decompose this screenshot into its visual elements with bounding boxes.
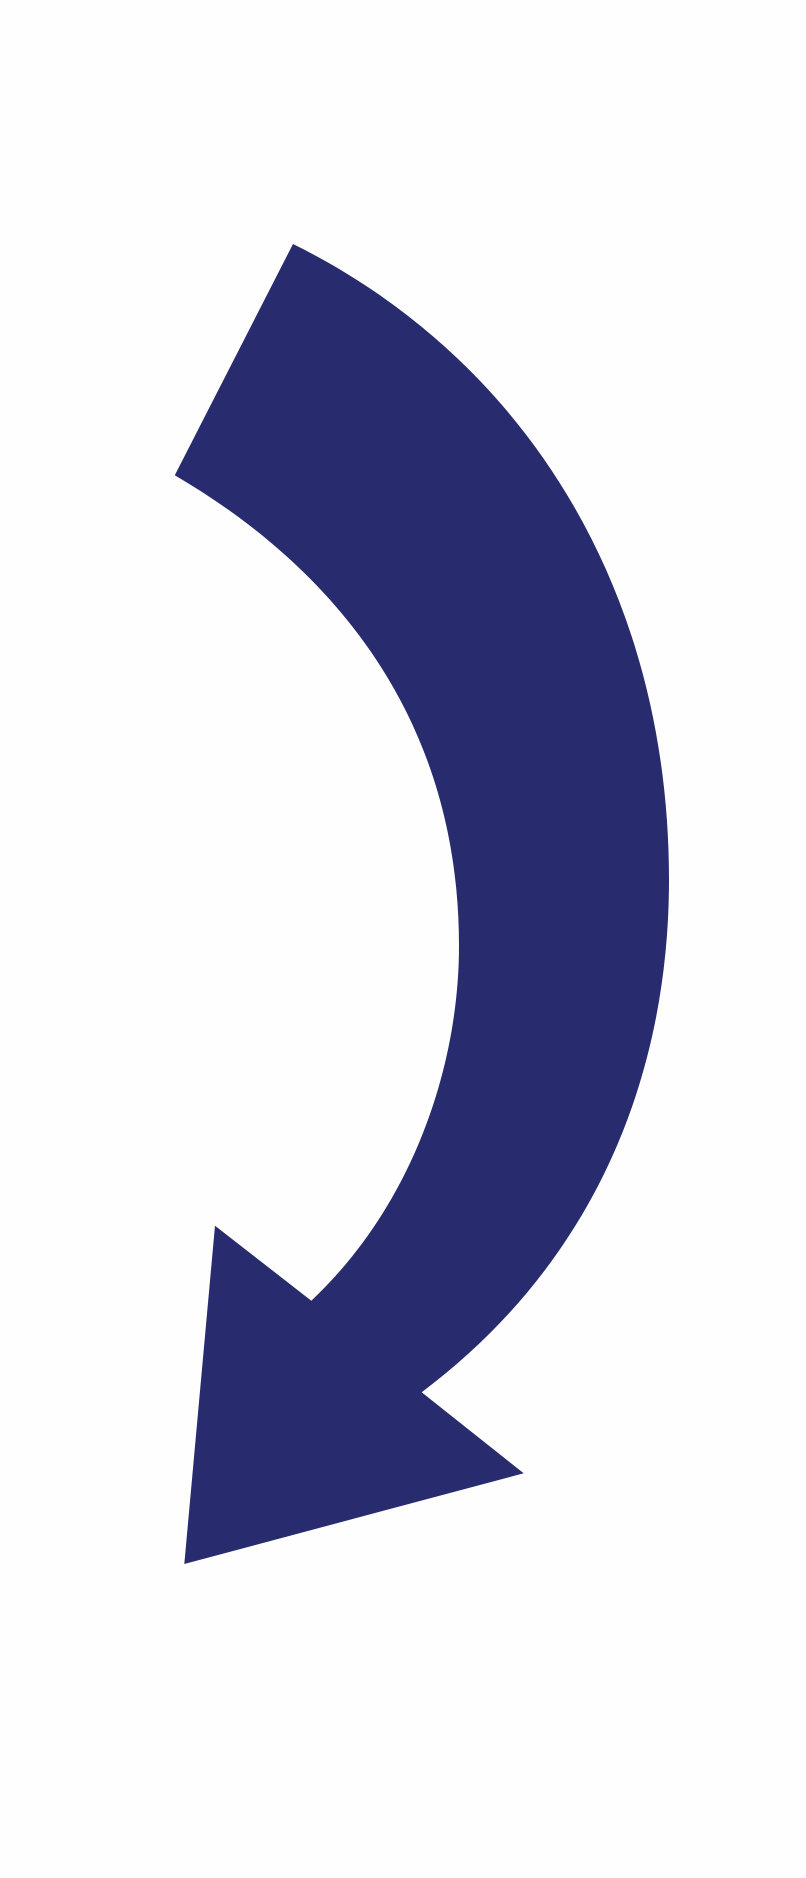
arrow: curved navy arrow pointing down-left (175, 244, 669, 1564)
